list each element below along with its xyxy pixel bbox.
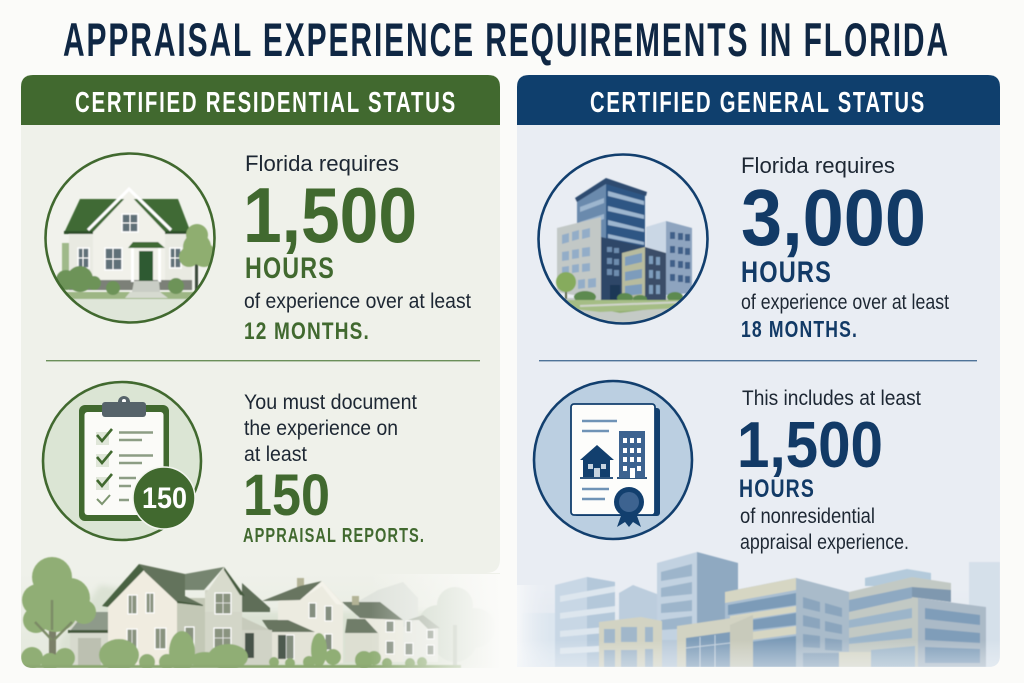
text block: nonresidential hours: appraisal experience. [740, 531, 909, 554]
text block: hours requirement: of experience over at least [244, 290, 471, 313]
text block: nonresidential hours [737, 387, 921, 554]
icon: house in circle [40, 153, 220, 328]
icon: office buildings in circle [537, 153, 709, 325]
header band [21, 75, 500, 125]
text block: nonresidential hours: HOURS [739, 475, 815, 503]
text block: hours requirement: HOURS [245, 252, 335, 285]
text block: appraisal reports: You must document [244, 391, 417, 414]
text block: nonresidential hours: of nonresidential [740, 505, 875, 528]
text block: appraisal reports: APPRAISAL REPORTS. [243, 525, 425, 547]
text block: hours requirement: Florida requires [741, 153, 895, 178]
text block: appraisal reports: 150 [243, 463, 330, 528]
text block: hours requirement: 12 MONTHS. [244, 318, 370, 345]
illustration: residential neighborhood [21, 557, 501, 673]
text block: nonresidential hours: 1,500 [737, 408, 883, 481]
illustration: commercial skyline [517, 552, 1000, 667]
text block: hours requirement: 3,000 [741, 173, 926, 262]
text block: nonresidential hours: This includes at least [742, 387, 921, 410]
panel: certified general [517, 75, 1000, 590]
text block: hours requirement: of experience over at least [741, 291, 949, 314]
icon: clipboard checklist with 150 badge: 150 [142, 482, 187, 515]
header band [517, 75, 1000, 125]
text block: appraisal reports: the experience on [244, 417, 398, 440]
icon: appraisal certificate [534, 381, 692, 539]
text block: hours requirement: 1,500 [243, 171, 417, 259]
text block: hours requirement: HOURS [741, 256, 832, 289]
text block: hours requirement [741, 153, 949, 342]
text block: hours requirement: Florida requires [245, 151, 399, 176]
panel: certified residential [21, 75, 500, 573]
text block: appraisal reports [243, 391, 425, 547]
text block: hours requirement: 18 MONTHS. [741, 316, 858, 342]
panel background [21, 120, 500, 573]
panel background [517, 120, 1000, 667]
text block: appraisal reports: at least [244, 443, 307, 466]
icon: clipboard checklist with 150 badge [43, 382, 201, 540]
header band: CERTIFIED RESIDENTIAL STATUS [75, 87, 457, 119]
text block: hours requirement [243, 151, 471, 345]
